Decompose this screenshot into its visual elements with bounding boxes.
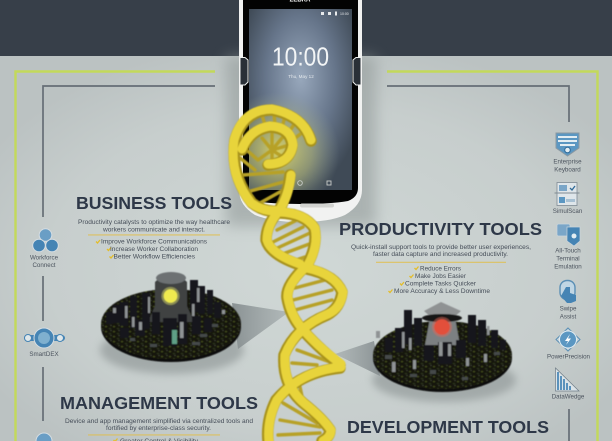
label: powerprecision: PowerPrecision [547,354,591,360]
icon: powerprecision [556,328,580,351]
dark buildings [106,280,221,346]
dna strand highlight layer [233,109,343,441]
productivity bullets: Reduce Errors [420,266,461,272]
business bullets: Improve Workforce Communications [101,240,207,246]
text: productivity description [351,245,531,258]
productivity bullets [388,266,491,295]
label: workforce connect: Workforce [30,254,59,262]
yellow light [162,287,180,305]
label: swipe assist [560,306,577,320]
dna strand back layer [234,110,342,441]
phone screen [249,9,352,190]
phone bezel [243,0,358,204]
icon: workforce connect [33,229,58,252]
label: all-touch terminal emulation: Terminal [556,256,580,262]
business bullets [96,240,207,260]
clock: 10:00 [272,42,329,72]
text: productivity description: Quick-install support tools to provide better user experiences, [351,245,531,251]
icon: swipe assist [560,280,576,303]
label: workforce connect: Connect [32,262,56,269]
productivity bullets: Complete Tasks Quicker [405,282,476,288]
label: datawedge: DataWedge [552,394,585,400]
text: management description: fortified by enterprise-class security. [106,426,211,432]
label: simulscan: SimulScan [553,208,583,215]
label: all-touch terminal emulation: Emulation [554,264,582,270]
text: management description: Device and app management simplified via centralized tools and [65,419,253,425]
phone body [239,0,362,222]
business bullets: Increase Worker Collaboration [110,247,198,253]
productivity bullets: Make Jobs Easier [415,274,466,280]
label: all-touch terminal emulation: All-Touch [555,248,581,254]
business bullets: Better Workflow Efficiencies [114,254,195,260]
lit facades [376,326,490,372]
icon: datawedge [556,368,579,391]
status bar: 10:00 [340,12,349,16]
frame lines [16,72,598,441]
dome [425,318,460,345]
red light [432,317,452,337]
icon: smartdex [24,328,65,348]
status bar [321,12,349,16]
heading: management tools: MANAGEMENT TOOLS [60,393,258,413]
phone shadow [226,56,376,226]
label: swipe assist: Swipe [560,306,577,312]
side buttons [240,58,361,85]
callout wedge: business city [232,303,289,349]
nav buttons [298,181,331,185]
label: enterprise keyboard [553,158,582,174]
label: all-touch terminal emulation [554,248,582,270]
header band [0,0,612,56]
lit facades [113,288,225,338]
date: Thu, May 12 [288,74,314,79]
text: productivity description: faster data capture and increased productivity. [373,252,508,258]
productivity bullets: More Accuracy & Less Downtime [394,289,491,295]
label: enterprise keyboard: Keyboard [554,166,581,174]
gold divider [376,261,506,264]
heading: development tools: DEVELOPMENT TOOLS [347,417,549,437]
heading: productivity tools: PRODUCTIVITY TOOLS [339,219,542,239]
city: management hub with yellow light [101,272,241,362]
text: business description: workers communicate and interact. [102,228,205,234]
city shadow [100,326,244,374]
city shadow [372,358,516,402]
heading: business tools: BUSINESS TOOLS [76,193,232,213]
icon: all-touch terminal emulation [557,224,580,246]
speaker grill [300,204,334,208]
label: smartdex: SmartDEX [29,351,59,358]
city: productivity hub with red light [373,302,512,392]
icon: enterprise keyboard [556,133,579,156]
dna rungs [240,113,337,435]
text: business description [78,220,231,234]
icon: next left tool [36,433,52,441]
DNA helix [233,109,343,441]
label: swipe assist: Assist [560,314,577,320]
phone [239,0,362,222]
callout wedge: productivity city [335,341,380,376]
text: management description [65,419,253,432]
dark buildings [385,310,506,364]
icon: simulscan [554,182,580,206]
label: workforce connect [30,254,59,269]
text: business description: Productivity catalysts to optimize the way healthcare [78,220,231,226]
dome [148,274,194,322]
gold divider [88,234,220,236]
gold divider [88,434,220,436]
management bullet [114,438,198,441]
label: enterprise keyboard: Enterprise [553,158,582,166]
